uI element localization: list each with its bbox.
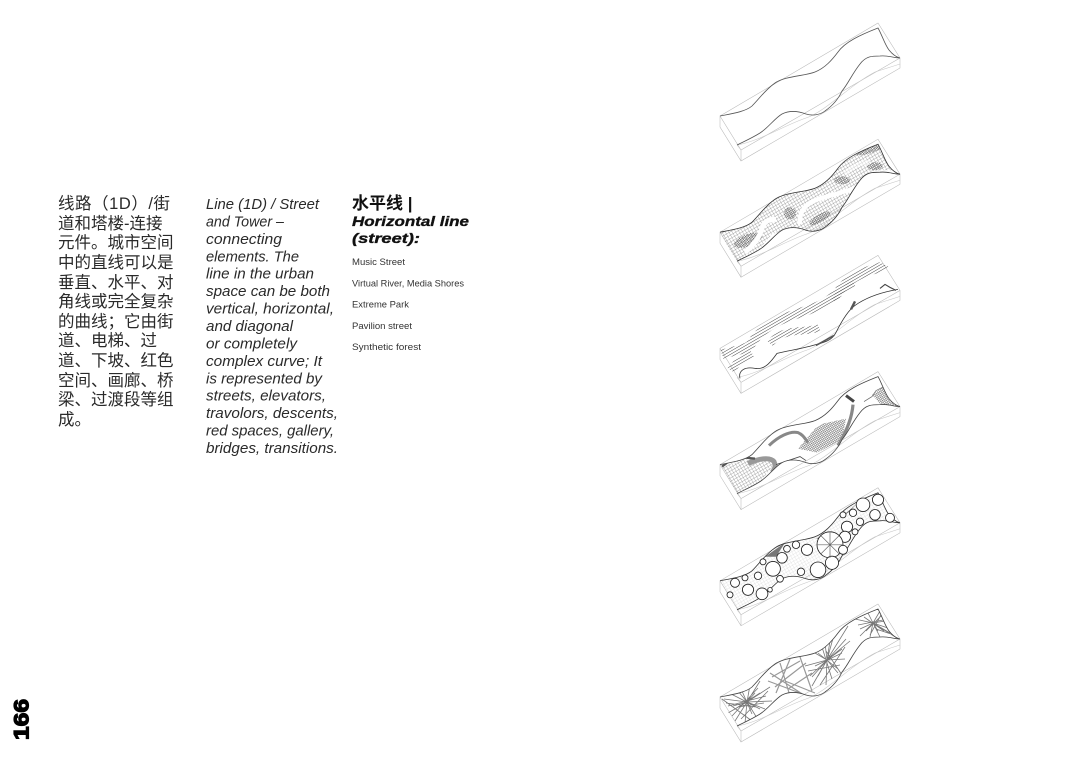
english italic text block: travolors, descents, — [206, 406, 338, 422]
chinese text block: 道、电梯、过 — [58, 331, 157, 350]
chinese text block: 线路（1D）/街 — [58, 194, 170, 213]
chinese text block: 梁、过渡段等组 — [58, 390, 174, 409]
english italic text block: streets, elevators, — [206, 389, 326, 405]
english italic text block: and Tower – — [206, 214, 285, 230]
english italic text block: Line (1D) / Street — [206, 197, 320, 213]
chinese text block: 成。 — [58, 410, 91, 429]
chinese text block: 中的直线可以是 — [58, 253, 174, 272]
english italic text block: bridges, transitions. — [206, 441, 338, 457]
chinese text block: 垂直、水平、对 — [58, 273, 174, 292]
list of street types: Music Street — [352, 257, 406, 267]
chinese text block — [58, 194, 174, 429]
english italic text block: space can be both — [206, 284, 330, 300]
heading: Horizontal line — [352, 213, 469, 229]
list of street types: Synthetic forest — [352, 342, 422, 352]
chinese text block: 道和塔楼-连接 — [58, 214, 162, 233]
heading — [352, 194, 469, 246]
heading: (street): — [352, 230, 420, 246]
list of street types: Extreme Park — [352, 300, 410, 310]
heading: 水平线 | — [352, 194, 412, 213]
chinese text block: 空间、画廊、桥 — [58, 371, 174, 390]
english italic text block: and diagonal — [206, 319, 294, 335]
list of street types — [352, 257, 465, 352]
list of street types: Virtual River, Media Shores — [352, 278, 465, 288]
diagram 3: extreme park ribbons — [720, 255, 900, 393]
chinese text block: 的曲线；它由街 — [58, 312, 174, 331]
chinese text block: 元件。城市空间 — [58, 233, 174, 252]
chinese text block: 道、下坡、红色 — [58, 351, 174, 370]
diagram 1: outline of the strip — [720, 23, 900, 161]
english italic text block: vertical, horizontal, — [206, 302, 334, 318]
english italic text block: connecting — [206, 232, 282, 248]
english italic text block: red spaces, gallery, — [206, 424, 334, 440]
diagram 6: synthetic forest — [720, 604, 900, 742]
list of street types: Pavilion street — [352, 321, 413, 331]
english italic text block — [206, 197, 338, 457]
diagram 2: mesh surface with virtual river — [715, 136, 905, 277]
chinese text block: 角线或完全复杂 — [58, 292, 174, 311]
page number: 166 — [10, 699, 34, 740]
english italic text block: elements. The — [206, 249, 299, 265]
infographic page — [13, 22, 900, 742]
english italic text block: line in the urban — [206, 267, 314, 283]
english italic text block: is represented by — [206, 371, 323, 387]
english italic text block: or completely — [206, 336, 298, 352]
english italic text block: complex curve; It — [206, 354, 323, 370]
diagram 5: circular pavilions — [715, 485, 905, 626]
diagram 4: pavilion street — [720, 372, 900, 510]
